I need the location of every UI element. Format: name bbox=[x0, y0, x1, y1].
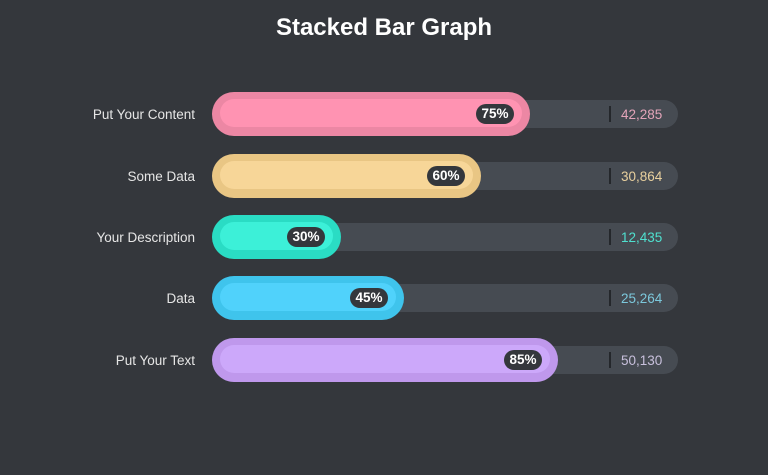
bar: 85% bbox=[212, 338, 558, 382]
row: data: Data bbox=[166, 291, 195, 306]
row: put your content: 42,285 bbox=[621, 107, 662, 122]
row: your description bbox=[96, 215, 678, 259]
bar: 30%: 30% bbox=[292, 229, 320, 244]
bar: 30% bbox=[212, 215, 341, 259]
row: put your content: Put Your Content bbox=[93, 107, 195, 122]
row: data: 25,264 bbox=[621, 291, 662, 306]
row: your description: Your Description bbox=[96, 230, 195, 245]
bar: 75% bbox=[212, 92, 530, 136]
bar: 75%: 75% bbox=[481, 106, 509, 121]
bar: 60% bbox=[212, 154, 481, 198]
row: put your text: Put Your Text bbox=[116, 353, 195, 368]
bar: 85%: 85% bbox=[509, 352, 537, 367]
title: Stacked Bar Graph bbox=[276, 14, 492, 41]
row: put your content bbox=[93, 92, 678, 136]
row: put your text: 50,130 bbox=[621, 353, 662, 368]
row: data bbox=[166, 276, 678, 320]
row: your description: 12,435 bbox=[621, 230, 662, 245]
row: some data bbox=[127, 154, 678, 198]
bar: 45%: 45% bbox=[355, 290, 383, 305]
row: put your text bbox=[116, 338, 678, 382]
row: some data: 30,864 bbox=[621, 169, 662, 184]
bar: 45% bbox=[212, 276, 404, 320]
bar: 60%: 60% bbox=[432, 168, 460, 183]
row: some data: Some Data bbox=[127, 169, 195, 184]
